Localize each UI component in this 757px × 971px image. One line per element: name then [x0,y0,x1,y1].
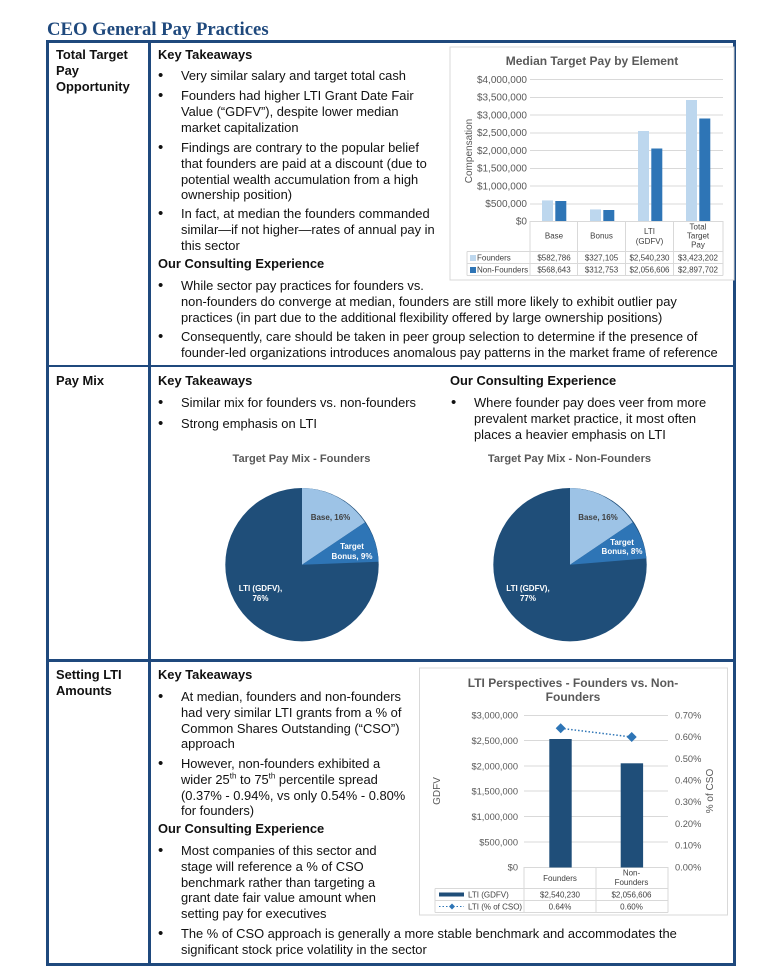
bullet: popular belief: Findings are contrary to the popular belief [181,140,419,155]
pie chart: founders: Target Pay Mix - Founders [233,453,370,465]
bar chart: median target pay by element: Target [687,232,710,240]
bar chart: median target pay by element: $312,753 [585,266,619,274]
bar chart: median target pay by element: Compensation [464,119,475,183]
combo chart: LTI perspectives: $1,000,000 [471,812,518,822]
panel: total target pay opportunity: • [158,87,163,104]
bullet: popular belief [158,139,427,202]
bullet: CSO approach: At median, founders and non-founders [181,689,401,704]
combo chart: LTI perspectives: 0.00% [675,862,701,872]
combo chart: LTI perspectives: Founders [543,874,577,883]
bullet: commanded [158,205,435,253]
heading: consulting experience: Our Consulting Experience [158,256,324,271]
bar chart: median target pay by element: Total [690,222,707,232]
pie chart: founders: 76% [252,594,269,603]
bar chart: median target pay by element: $1,500,000 [477,164,527,174]
title: CEO General Pay Practices [47,19,269,40]
panel: pay mix: • [451,394,456,411]
bar chart: median target pay by element: $1,000,000 [477,182,527,192]
panel: total target pay opportunity: • [158,205,163,222]
combo chart: LTI perspectives: LTI (GDFV) [468,890,509,900]
bullet: percentile spread: However, non-founders exhibited a [181,756,380,771]
combo chart: LTI perspectives: $3,000,000 [471,710,518,720]
combo chart: LTI perspectives: 0.60% [675,732,701,742]
bullet: stable benchmark: The % of CSO approach is generally a more stable benchmark and accommodates the [181,926,677,941]
pie chart: founders [225,453,379,642]
bar chart: median target pay by element: $2,500,000 [477,128,527,139]
pie chart: non-founders: 77% [520,594,536,603]
bar chart: median target pay by element: Non-Founders [477,266,528,274]
bullet: founder pay: Where founder pay does veer from more [474,395,706,410]
bullet: percentile spread: wider 25th to 75th percentile spread [181,772,378,787]
combo chart: LTI perspectives: $2,056,606 [611,890,652,900]
heading: key takeaways: Key Takeaways [158,667,252,682]
row label: Total Target [56,47,128,62]
row label: Pay Mix [56,373,104,388]
bullet: percentile spread: (0.37% - 0.94%, vs only 0.54% - 0.80% [181,788,405,803]
bullet: benchmark [158,842,377,921]
panel: total target pay opportunity: • [158,328,163,345]
bar chart: median target pay by element: $2,056,606 [629,266,670,274]
pie chart: non-founders: Base, 16% [578,513,618,522]
bullet: benchmark: benchmark rather than targeting a [181,875,375,890]
bullet: peer group: Consequently, care should be taken in peer group selection to determine if the presence of [181,329,697,344]
pie chart: non-founders: Target Pay Mix - Non-Founders [488,453,651,465]
bar chart: median target pay by element: $3,500,000 [477,92,527,104]
bullet: popular belief: ownership position) [181,187,292,202]
panel: total target pay opportunity: • [158,139,163,156]
panel: pay mix: • [158,415,163,432]
combo chart: LTI perspectives: % of CSO [705,769,716,813]
bar chart: median target pay by element: $2,540,230 [629,254,670,262]
combo chart: LTI perspectives: 0.30% [675,797,701,807]
combo chart: LTI perspectives: LTI Perspectives - Founders vs. Non- [468,676,678,690]
panel: setting LTI amounts [56,667,677,957]
pie chart: founders: Bonus, 9% [332,552,372,561]
combo chart: LTI perspectives: $2,000,000 [471,762,518,772]
pie chart: non-founders: LTI (GDFV), [506,584,550,593]
row label [56,47,130,94]
pie chart: founders: LTI (GDFV), [239,584,282,593]
bullet: LTI [158,87,414,135]
bullet: CSO approach: Common Shares Outstanding (“CSO”) [181,721,400,736]
bar chart: median target pay by element: $0 [516,216,527,228]
panel: total target pay opportunity: • [158,67,163,84]
bar chart: median target pay by element: Founders [477,254,511,262]
combo chart: LTI perspectives: 0.50% [675,754,701,764]
combo chart: LTI perspectives: $500,000 [479,838,518,848]
combo chart: LTI perspectives: 0.60% [620,902,643,912]
row label: Setting LTI [56,667,122,682]
combo chart: LTI perspectives: $2,540,230 [540,890,581,900]
combo chart: LTI perspectives: Founders [546,690,601,704]
bar chart: median target pay by element: Median Target Pay by Element [506,54,678,68]
bullet: benchmark: Most companies of this sector and [181,843,377,858]
combo chart: LTI perspectives: 0.10% [675,840,701,850]
bar chart: median target pay by element [450,46,734,280]
heading: key takeaways: Key Takeaways [158,47,252,62]
bullet: popular belief: potential wealth accumulation from a high [181,172,418,187]
panel: setting LTI amounts: • [158,688,163,705]
bullet: benchmark: stage will reference a % of CSO [181,859,364,874]
combo chart: LTI perspectives: 0.70% [675,710,701,720]
bullet: peer group [158,328,718,360]
row label: Amounts [56,683,112,698]
bar chart: median target pay by element: LTI [644,227,655,236]
pie chart: non-founders [488,453,651,642]
pie chart: founders: Target [340,542,364,551]
bar chart: median target pay by element: Base [545,232,564,240]
bullet: stable benchmark: significant stock price volatility in the sector [181,942,427,957]
bullet: similar mix: Similar mix for founders vs. non-founders [181,395,416,410]
combo chart: LTI perspectives: $0 [508,862,518,872]
bar chart: median target pay by element: $3,000,000 [477,110,527,122]
bullet: founder pay: prevalent market practice, it most often [474,411,696,426]
bullet: emphasis: Strong emphasis on LTI [181,416,317,431]
bullet: outliers: While sector pay practices for founders vs. [181,278,424,293]
bullet: percentile spread [158,755,405,818]
row label: Opportunity [56,79,130,94]
combo chart: LTI perspectives: $1,500,000 [471,786,518,796]
bar chart: median target pay by element: Bonus [590,232,613,240]
combo chart: LTI perspectives: 0.64% [549,902,571,912]
bullet: outliers [158,277,677,325]
heading: consulting experience: Our Consulting Experience [158,821,324,836]
bar chart: median target pay by element: $568,643 [537,266,571,274]
combo chart: LTI perspectives: Non- [623,868,641,878]
row label: Pay [56,63,79,78]
bar chart: median target pay by element: (GDFV) [636,237,664,246]
bullet: popular belief: that founders are paid at a discount (due to [181,156,427,171]
bullet: LTI: market capitalization [181,120,299,135]
bullet: salary: Very similar salary and target total cash [181,68,406,83]
bullet: CSO approach: approach [181,736,235,751]
bullet: founder pay: places a heavier emphasis on LTI [474,427,666,442]
bullet: LTI: Value (“GDFV”), despite lower median [181,104,399,119]
combo chart: LTI perspectives [419,668,728,916]
panel: total target pay opportunity: • [158,277,163,294]
bar chart: median target pay by element: $500,000 [485,199,527,210]
row label [56,667,122,698]
bullet: commanded: similar—if not higher—rates of annual pay in [181,222,435,237]
panel: setting LTI amounts: • [158,755,163,772]
pie chart: founders: Base, 16% [311,513,350,522]
bullet: commanded: In fact, at median the founders commanded [181,206,430,221]
bar chart: median target pay by element: Pay [691,240,705,250]
panel: pay mix [56,373,706,442]
bullet: founder pay [451,394,706,442]
panel: pay mix: • [158,394,163,411]
panel: setting LTI amounts: • [158,842,163,859]
bar chart: median target pay by element: $3,423,202 [678,254,719,262]
combo chart: LTI perspectives: LTI (% of CSO) [468,902,522,912]
bar chart: median target pay by element: $582,786 [537,254,571,262]
panel: total target pay opportunity [56,47,718,360]
pie chart: non-founders: Target [610,538,634,547]
combo chart: LTI perspectives: $2,500,000 [471,736,518,746]
bullet: benchmark: setting pay for executives [181,906,326,921]
bar chart: median target pay by element: $327,105 [585,254,619,262]
bar chart: median target pay by element: $2,897,702 [678,266,719,274]
bar chart: median target pay by element: $4,000,000 [477,75,527,86]
bullet: outliers: non-founders do converge at median, founders are still more likely to exhibit outlier pay [181,294,677,309]
bullet: percentile spread: for founders) [181,803,254,818]
heading: consulting experience: Our Consulting Experience [450,373,616,388]
panel: setting LTI amounts: • [158,925,163,942]
bullet: outliers: practices (in part due to the additional flexibility offered by large ownership positions) [181,310,662,325]
combo chart: LTI perspectives: 0.40% [675,776,701,786]
pie chart: non-founders: Bonus, 8% [602,547,642,556]
combo chart: LTI perspectives: 0.20% [675,819,701,829]
bullet: CSO approach [158,688,402,751]
bullet: commanded: this sector [181,238,240,253]
bullet: peer group: founder-led organizations introduces anomalous pay patterns in the market frame of reference [181,345,718,360]
heading: key takeaways: Key Takeaways [158,373,252,388]
bullet: benchmark: grant date fair value amount when [181,890,376,905]
bullet: LTI: Founders had higher LTI Grant Date Fair [181,88,414,103]
combo chart: LTI perspectives: GDFV [432,777,443,805]
bullet: stable benchmark [158,925,677,957]
bar chart: median target pay by element: $2,000,000 [477,146,527,157]
bullet: CSO approach: had very similar LTI grants from a % of [181,705,401,720]
combo chart: LTI perspectives: Founders [615,878,648,887]
